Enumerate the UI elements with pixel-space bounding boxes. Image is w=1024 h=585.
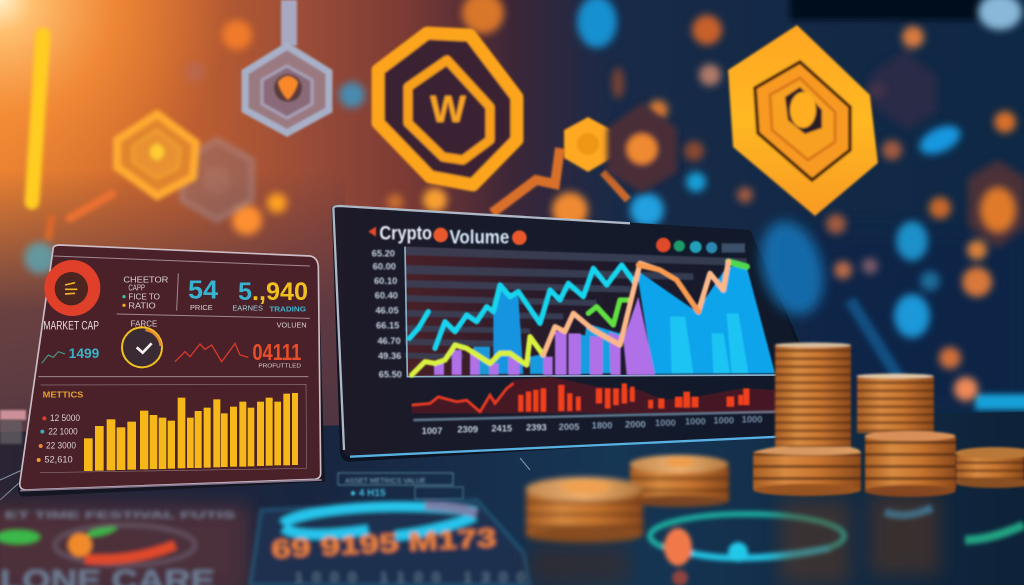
timeline: 2000 [625,419,646,429]
y axis labels: 66.15 [376,321,399,331]
timeline: 1007 [422,426,442,436]
heading: crypto volume: Volume [449,227,510,248]
icon: market cap badge [44,260,100,316]
stat: 54 price: 54 [188,274,219,304]
sparkline: red volume 04111: 04111 [252,339,301,365]
stat: 5,940 earnings trading: TRADING [269,304,306,313]
panel: market cap metrics tablet [18,245,325,497]
icon: large hexagon token [728,25,878,216]
y axis labels: 65.20 [372,249,395,259]
stat: 5,940 earnings trading: EARNES [232,304,263,313]
line and bar chart [405,247,777,377]
text: key list: CHEETOR [123,275,168,285]
text: key list [122,275,168,310]
blue glow over tablet right edge [751,214,833,322]
y axis labels: 60.10 [374,276,397,286]
bar chart: metrics: METTICS [43,389,84,399]
timeline: 2415 [491,424,512,434]
timeline: 2309 [457,425,478,435]
icon: faint grey hexagon [182,140,252,220]
y axis labels: 65.50 [379,369,402,379]
text: key list: CAPP [128,283,145,293]
bar chart: metrics: 12 5000 [50,413,80,423]
panel: crypto volume tablet [332,205,800,462]
coin stack: front [526,477,643,543]
bar chart: metrics: 52,610 [44,455,73,465]
sparkline: 1499: 1499 [69,345,100,361]
text: volume: VOLUEN [277,322,307,329]
timeline: 1000 [655,418,676,428]
timeline [413,412,777,436]
coin stack: middle [630,455,729,507]
sparkline: red volume 04111 [175,339,301,369]
coin stack: right [856,374,956,497]
small floor label box [338,473,463,499]
icon: large octagon W token: W [430,89,466,131]
icon: dark hexagon with orange core [607,103,677,193]
y axis labels: 46.05 [375,305,399,315]
y axis labels: 49.36 [378,351,401,361]
text: farce gauge label: FARCE [131,320,157,329]
teal ring on floor [650,508,1024,585]
coin stack: far right [955,447,1024,488]
lower red volume chart [412,377,777,413]
y axis labels: 60.00 [373,261,396,271]
floor readout center: gauge and orange numbers: 69 9195 M173 [271,522,497,564]
stat: 5,940 earnings trading: 5.,940 [238,279,308,306]
icon: grey hexagon [245,46,329,133]
icon: small gold hexagon [564,117,612,172]
sparkline: 1499 [42,345,100,363]
floor readout center: gauge and orange numbers [250,500,530,585]
small floor label box: ASSET METRICS VALUE [345,478,426,485]
floor readout left: market care: ET TIME FESTIVAL FUTIS [5,510,235,520]
floor readout center: gauge and orange numbers: 1000 1100 1300 [295,569,525,585]
heading: crypto volume: Crypto [379,223,432,244]
y axis labels: 60.40 [375,290,398,300]
sparkline: red volume 04111: PROFUTTLED [258,363,301,369]
timeline: 1000 [713,415,734,425]
y axis labels [372,249,402,379]
timeline: 1800 [592,421,612,431]
small floor label box: ● 4 H15 [350,488,386,499]
timeline: 2393 [526,423,547,433]
icon: large octagon W token [378,33,517,185]
icon: blurred gold hexagon left [117,114,196,196]
coin reflections [530,495,940,585]
stat: 54 price: PRICE [190,303,213,312]
bokeh lights [24,0,1024,401]
timeline: 1000 [742,415,762,425]
text: market cap: MARKET CAP [43,319,99,332]
icon: check gauge [122,327,162,367]
floor readout left: market care [0,505,250,585]
coin stack: tall center [753,342,861,496]
bar chart: metrics: 22 1000 [48,427,78,437]
text: key list: FICE TO [128,291,160,301]
bar chart: metrics [37,384,307,473]
text: key list: RATIO [128,300,156,310]
legend dots [656,238,745,253]
y axis labels: 46.70 [377,336,401,346]
floor surface [0,410,1024,585]
heading: crypto volume [368,223,527,248]
bar chart: metrics: 22 3000 [46,441,76,451]
timeline: 1000 [685,417,706,427]
timeline: 2005 [559,422,579,432]
